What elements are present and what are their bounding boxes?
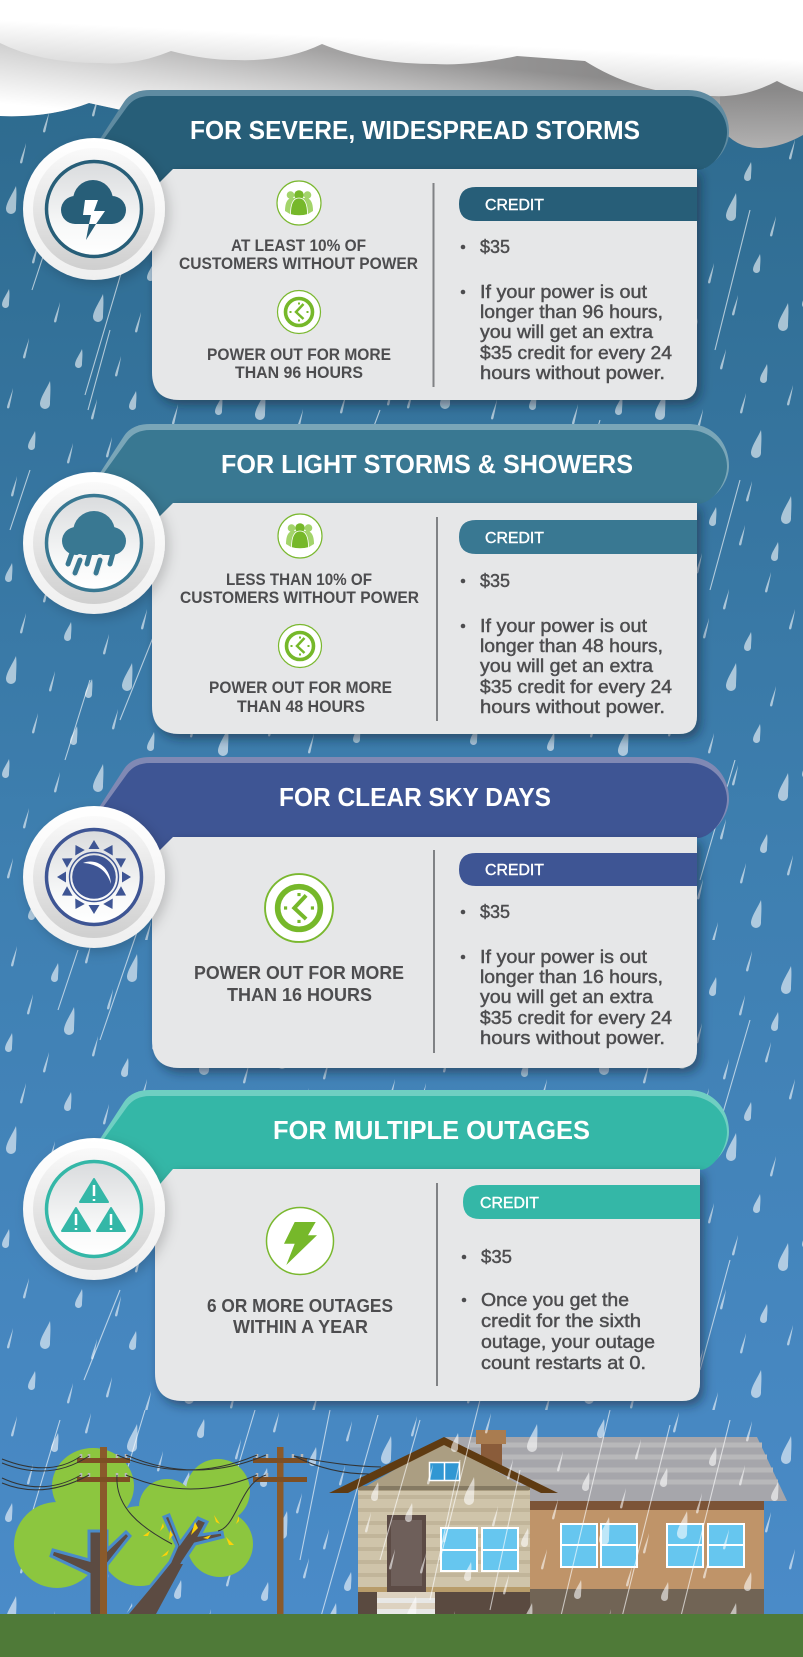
credit label bbox=[459, 187, 697, 221]
criterion: outages bbox=[207, 1295, 393, 1337]
card body bbox=[152, 503, 697, 734]
criterion: customers: AT LEAST 10% OF bbox=[231, 237, 366, 255]
credit details: Once you get the bbox=[481, 1290, 629, 1310]
credit details: count restarts at 0. bbox=[481, 1353, 646, 1373]
criterion: customers: LESS THAN 10% OF bbox=[226, 571, 372, 589]
heading: FOR MULTIPLE OUTAGES bbox=[273, 1115, 590, 1145]
criterion: customers bbox=[180, 571, 419, 607]
credit details: longer than 16 hours, bbox=[480, 967, 663, 987]
credit details: you will get an extra bbox=[480, 987, 654, 1007]
icon: rain cloud badge bbox=[23, 472, 165, 614]
trees and power lines bbox=[2, 1447, 381, 1614]
criterion: customers: CUSTOMERS WITHOUT POWER bbox=[179, 255, 418, 273]
credit label: CREDIT bbox=[485, 197, 544, 214]
credit details bbox=[461, 571, 672, 717]
criterion: duration: THAN 96 HOURS bbox=[235, 364, 363, 382]
icon: lightning bolt bbox=[266, 1208, 334, 1274]
credit details bbox=[462, 1247, 655, 1373]
credit details: hours without power. bbox=[480, 697, 665, 717]
credit details: $35 bbox=[480, 571, 510, 591]
panel: multiple outages bbox=[23, 1090, 729, 1401]
credit details: $35 bbox=[481, 1247, 512, 1267]
criterion: duration bbox=[194, 962, 404, 1005]
criterion: duration: POWER OUT FOR MORE bbox=[207, 346, 391, 364]
credit details bbox=[461, 902, 672, 1048]
credit details: credit for the sixth bbox=[481, 1311, 641, 1331]
credit label bbox=[463, 1185, 700, 1219]
broken tree bbox=[128, 1515, 223, 1614]
icon: warning triangles badge bbox=[23, 1138, 165, 1280]
credit label: CREDIT bbox=[485, 530, 544, 547]
criterion: duration: POWER OUT FOR MORE bbox=[194, 962, 404, 983]
credit details: hours without power. bbox=[480, 363, 665, 383]
credit details: longer than 48 hours, bbox=[480, 636, 663, 656]
storm cloud bbox=[0, 0, 803, 148]
credit details: $35 bbox=[480, 902, 510, 922]
icon: storm cloud badge bbox=[23, 138, 165, 280]
criterion: customers: CUSTOMERS WITHOUT POWER bbox=[180, 589, 419, 607]
icon: clock bbox=[278, 624, 322, 668]
heading: FOR CLEAR SKY DAYS bbox=[279, 782, 551, 812]
credit details: $35 bbox=[480, 237, 510, 257]
credit details: $35 credit for every 24 bbox=[480, 343, 672, 363]
card body bbox=[152, 169, 697, 400]
criterion: duration: THAN 16 HOURS bbox=[227, 984, 372, 1005]
credit label: CREDIT bbox=[485, 862, 544, 879]
credit details: $35 credit for every 24 bbox=[480, 677, 672, 697]
credit details bbox=[461, 237, 672, 383]
criterion: outages: 6 OR MORE OUTAGES bbox=[207, 1295, 393, 1316]
credit details: you will get an extra bbox=[480, 656, 654, 676]
panel: light storms bbox=[23, 424, 729, 734]
icon: clock bbox=[278, 290, 320, 334]
power lines bbox=[2, 1455, 381, 1544]
electric sparks bbox=[143, 1515, 239, 1557]
panel: clear sky days bbox=[23, 757, 729, 1068]
credit details: If your power is out bbox=[480, 282, 647, 302]
icon: customers bbox=[278, 514, 322, 558]
header ribbon bbox=[96, 424, 729, 528]
criterion: duration bbox=[207, 346, 391, 382]
criterion: customers bbox=[179, 237, 418, 273]
header ribbon bbox=[96, 1090, 729, 1194]
criterion: duration: THAN 48 HOURS bbox=[237, 698, 365, 716]
heading: FOR LIGHT STORMS & SHOWERS bbox=[221, 449, 633, 479]
upright tree bbox=[51, 1531, 130, 1614]
card body bbox=[155, 1169, 700, 1401]
card body bbox=[152, 837, 697, 1068]
credit label bbox=[459, 520, 697, 554]
credit details: outage, your outage bbox=[481, 1332, 655, 1352]
criterion: duration bbox=[209, 679, 392, 716]
utility poles bbox=[77, 1447, 307, 1614]
icon: clock bbox=[265, 874, 333, 942]
icon: customers bbox=[277, 181, 321, 225]
credit details: $35 credit for every 24 bbox=[480, 1008, 672, 1028]
header ribbon bbox=[96, 757, 729, 861]
icon: sun badge bbox=[23, 806, 165, 948]
credit details: longer than 96 hours, bbox=[480, 302, 663, 322]
credit details: If your power is out bbox=[480, 616, 647, 636]
credit details: If your power is out bbox=[480, 947, 647, 967]
credit details: you will get an extra bbox=[480, 322, 654, 342]
header ribbon bbox=[96, 90, 729, 194]
credit label bbox=[459, 853, 697, 886]
credit label: CREDIT bbox=[480, 1195, 539, 1212]
ground bbox=[0, 1614, 803, 1657]
credit details: hours without power. bbox=[480, 1028, 665, 1048]
criterion: outages: WITHIN A YEAR bbox=[233, 1316, 368, 1337]
house bbox=[329, 1430, 787, 1614]
tree foliage bbox=[14, 1448, 253, 1588]
panel: severe storms bbox=[23, 90, 729, 400]
criterion: duration: POWER OUT FOR MORE bbox=[209, 679, 392, 697]
heading: FOR SEVERE, WIDESPREAD STORMS bbox=[190, 115, 640, 145]
